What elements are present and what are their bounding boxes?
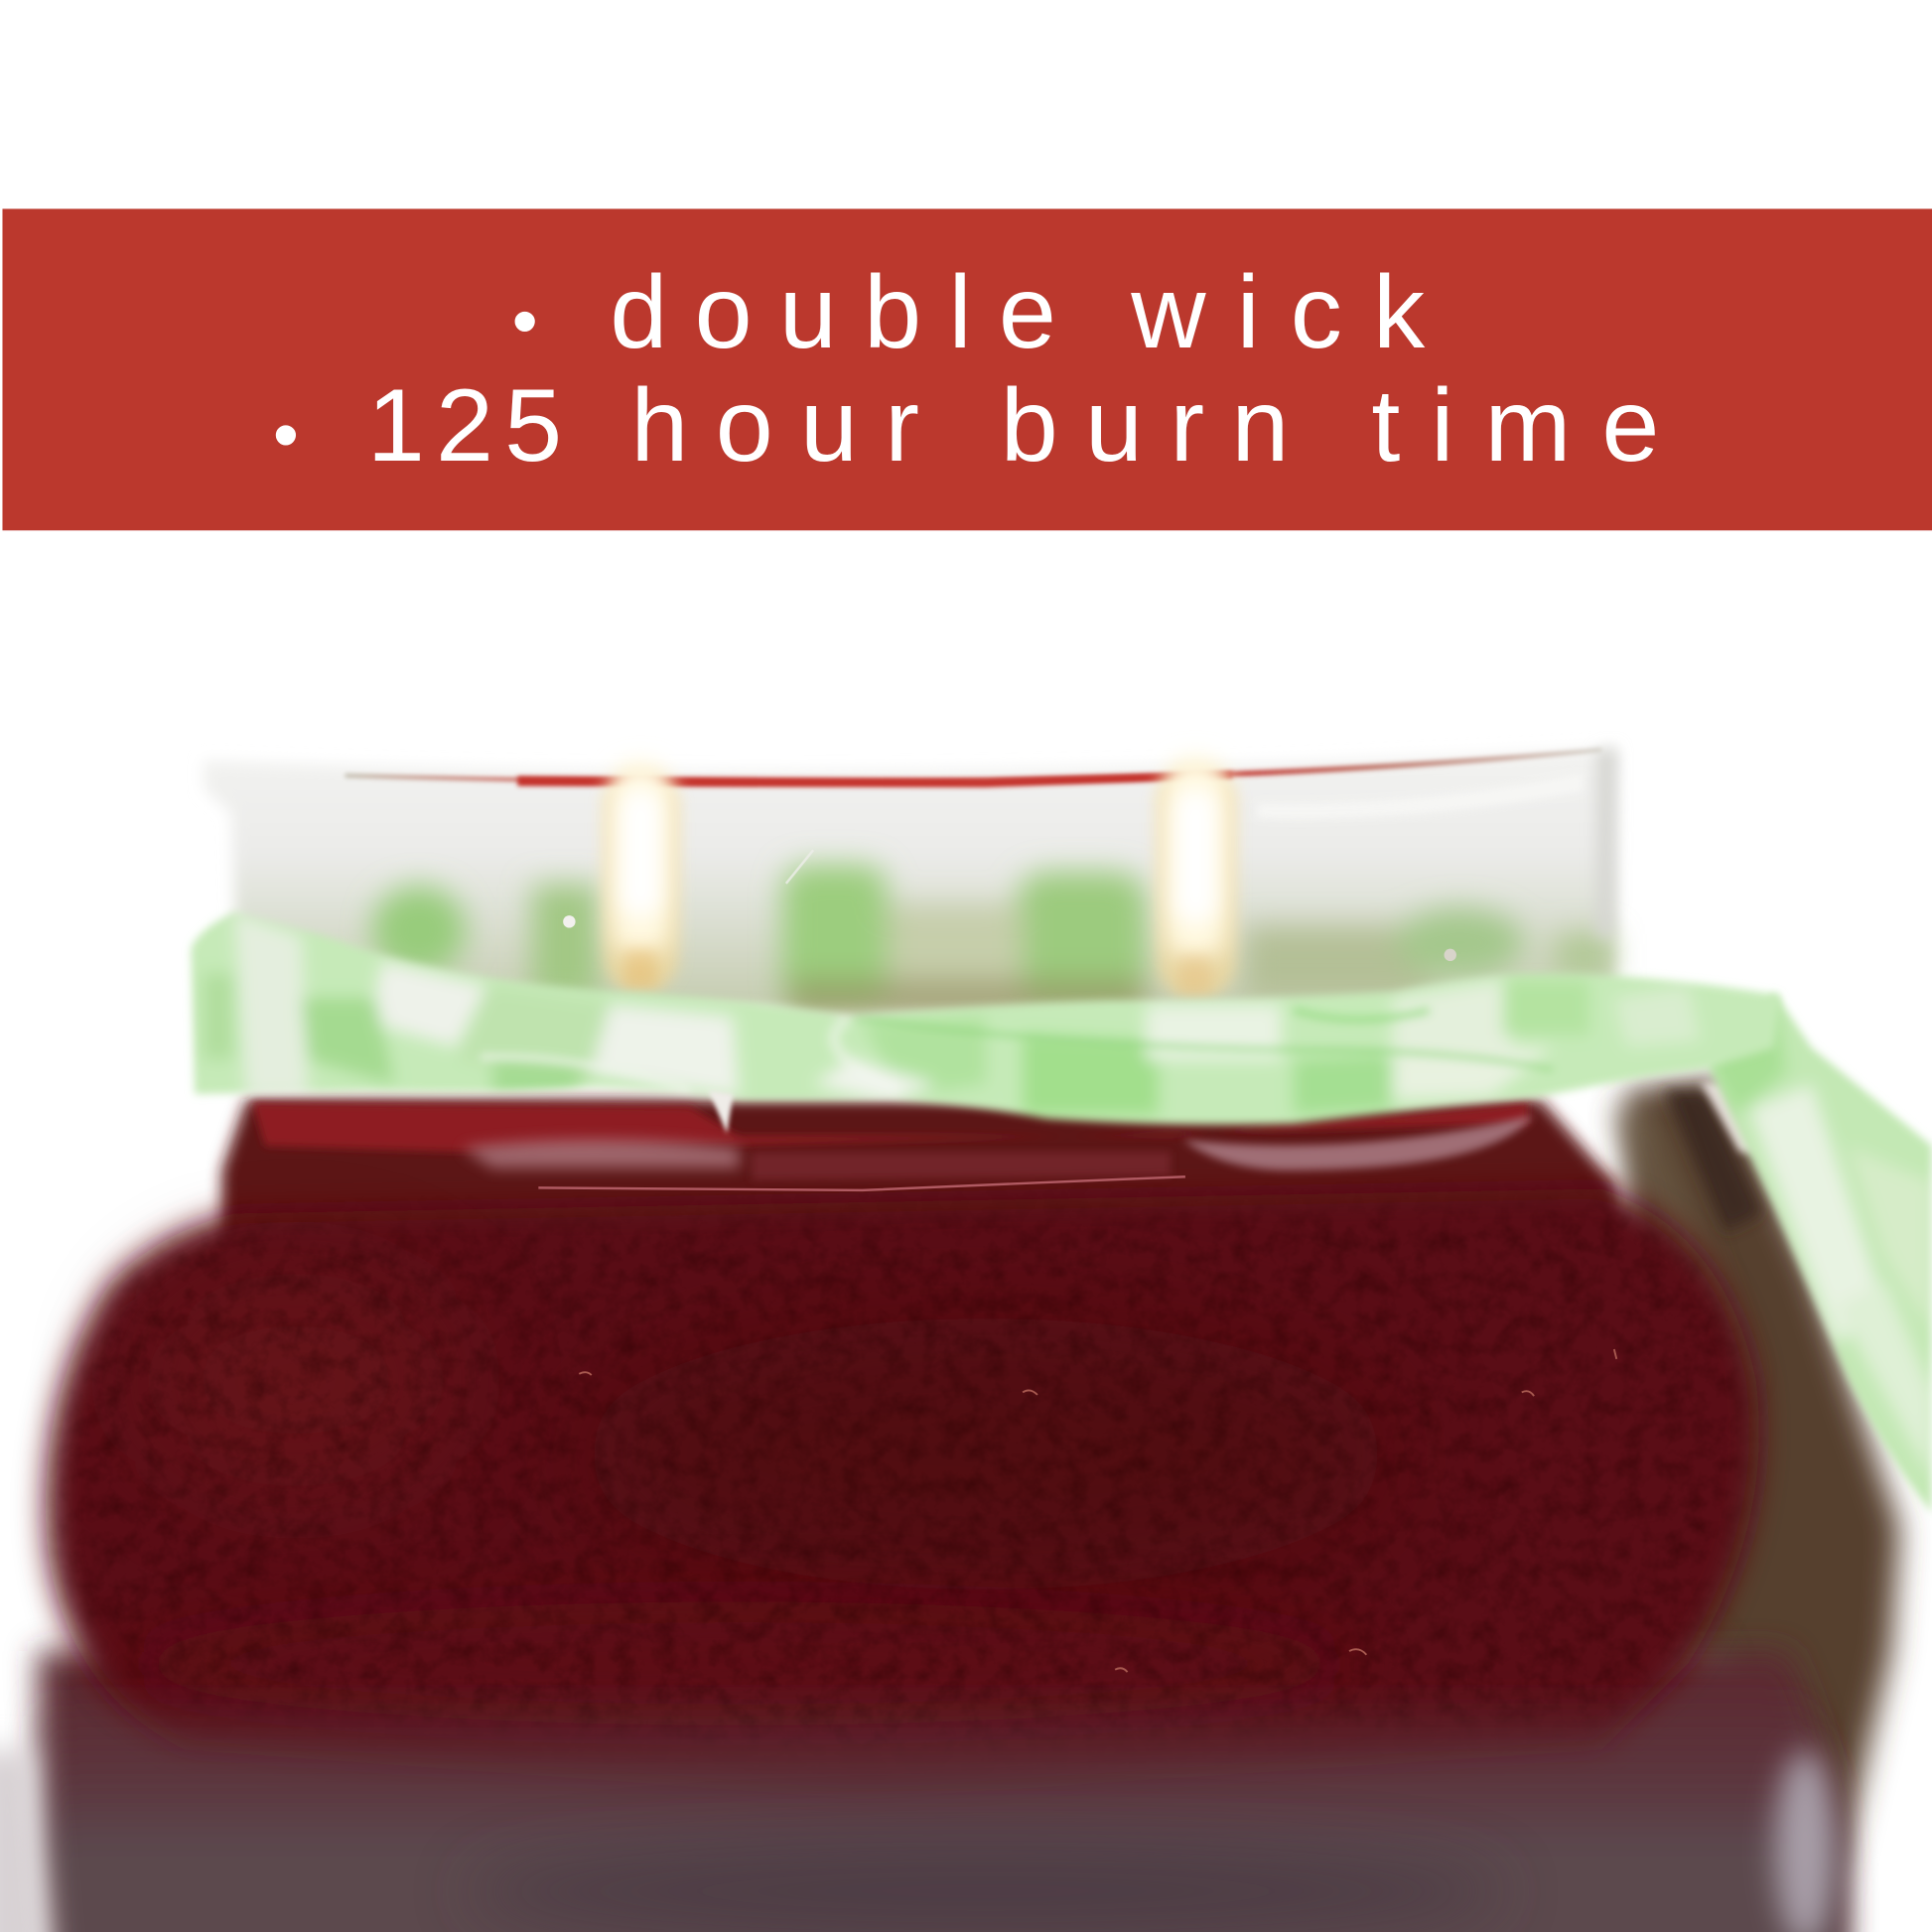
text line: 125 hour burn time: 125 [367, 368, 573, 483]
text line: 125 hour burn time: burn [1001, 368, 1316, 483]
jar right glass shoulder [1614, 1078, 1900, 1879]
text line: double wick: double [610, 255, 1083, 370]
jar base underlay [37, 1651, 1844, 1932]
jar glass rim section [204, 747, 1616, 1014]
text line: 125 hour burn time: hour [630, 368, 946, 483]
jar wax body [20, 1168, 1775, 1779]
neck seam line [538, 1176, 1185, 1190]
wax glow through glass [372, 865, 1611, 1014]
gingham ribbon tail [1708, 991, 1932, 1513]
rim line [345, 748, 1601, 787]
text line: double wick: wick [1130, 255, 1455, 370]
text line: 125 hour burn time: • [273, 393, 299, 476]
glass specks [563, 915, 576, 928]
ribbon frayed thread [709, 1090, 733, 1134]
jar lower section [0, 1688, 1845, 1932]
text line: 125 hour burn time: time [1371, 368, 1690, 483]
left flame [604, 761, 679, 991]
photo: double wick candle jar [0, 747, 1932, 1932]
text line: double wick: • [512, 280, 538, 362]
right flame [1157, 757, 1236, 996]
jar neck [208, 1088, 1626, 1241]
banner [2, 208, 1932, 530]
gingham ribbon band [185, 905, 1787, 1140]
